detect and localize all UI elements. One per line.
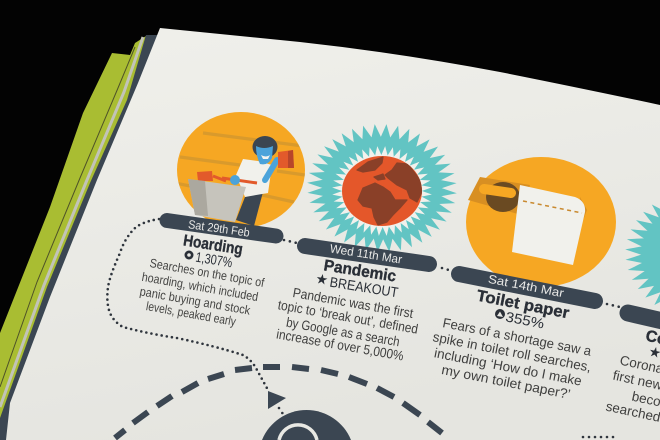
panel: Hoarding text: Hoarding	[182, 232, 244, 259]
icon: partial starburst	[617, 180, 660, 330]
panel: Hoarding text: 1,307%	[195, 249, 234, 270]
panel: Pandemic text	[275, 257, 419, 364]
panel: Toilet paper text: my own toilet paper?’	[440, 362, 572, 402]
icon: hoarding illustration	[175, 112, 305, 228]
icon: toilet roll	[466, 157, 616, 287]
date pill: Wed 11th Mar	[305, 241, 429, 267]
date pill: Sat 14th Mar: Sat 14th Mar	[487, 272, 565, 300]
date pill: partial	[628, 313, 660, 325]
central dashed arc	[115, 367, 442, 438]
panel: Hoarding text: levels, peaked early	[145, 299, 238, 329]
panel: Pandemic text: by Google as a search	[285, 315, 401, 349]
panel: Hoarding text: panic buying and stock	[139, 284, 252, 318]
central dark circle icon	[262, 410, 351, 440]
panel: Pandemic text: BREAKOUT	[329, 274, 400, 300]
dotted connectors between pills	[284, 240, 620, 437]
date pill: Sat 29th Feb	[167, 217, 276, 240]
panel: Pandemic text: topic to ‘break out’, defined	[277, 297, 419, 337]
arrowhead	[268, 391, 286, 409]
date pill: Sat 14th Mar	[459, 272, 595, 301]
panel: Toilet paper text: including ‘How do I make	[433, 345, 583, 389]
panel: Pandemic text: Pandemic was the first	[292, 285, 415, 321]
panel: Toilet paper text: spike in toilet roll searches,	[432, 329, 592, 375]
panel: Toilet paper text: 355%	[504, 308, 546, 332]
dotted connector: first pill to centre	[107, 219, 268, 390]
panel: Toilet paper text	[432, 288, 593, 402]
panel: Hoarding text: hoarding, which included	[141, 270, 259, 304]
panel: Pandemic text: ★	[315, 270, 329, 288]
icon: starburst with globe	[307, 124, 457, 250]
panel: Pandemic text: increase of over 5,000%	[275, 326, 405, 364]
panel: partial fourth entry text	[604, 328, 660, 425]
book page edges	[0, 35, 160, 440]
panel: Pandemic text: Pandemic	[323, 257, 397, 286]
panel: Hoarding text	[139, 232, 266, 329]
date pill: Wed 11th Mar: Wed 11th Mar	[329, 241, 403, 267]
panel: Toilet paper text: Toilet paper	[475, 288, 571, 322]
panel: Hoarding text: Searches on the topic of	[149, 256, 266, 290]
dots below arrowhead	[279, 408, 283, 414]
panel: Toilet paper text: Fears of a shortage saw a	[441, 315, 593, 359]
date pill: Sat 29th Feb: Sat 29th Feb	[187, 217, 251, 240]
